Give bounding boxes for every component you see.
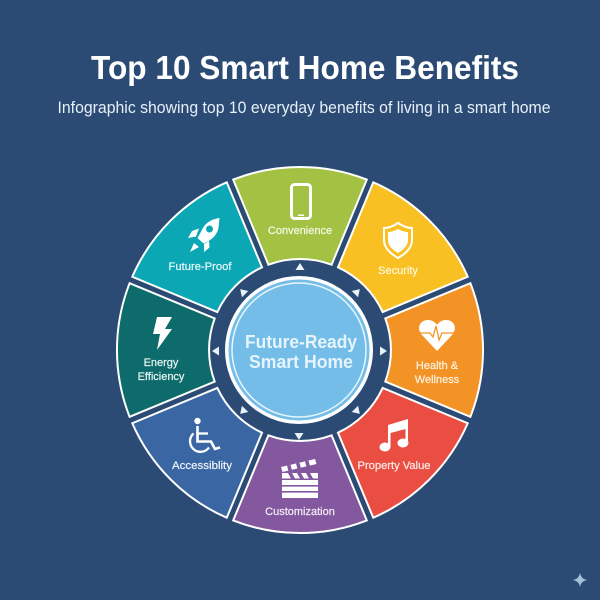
icon: heart with pulse — [419, 320, 455, 351]
arrow: south-east — [352, 406, 363, 417]
centre text — [245, 331, 358, 372]
arrow: south — [294, 433, 304, 440]
icon: lightning bolt — [153, 317, 172, 350]
segment: accessibility — [123, 363, 287, 527]
title: Top 10 Smart Home Benefits — [91, 49, 519, 86]
segment: convenience — [233, 167, 367, 265]
icon: wheelchair — [190, 418, 220, 452]
arrow: north-west — [237, 286, 248, 297]
icon: corner sparkle — [573, 573, 587, 587]
segment: security — [313, 173, 477, 337]
label: property value: Property Value — [358, 460, 430, 472]
icon: music note — [380, 419, 408, 452]
icon: rocket — [188, 218, 220, 252]
icon: smartphone — [292, 184, 310, 218]
label: security: Security — [378, 265, 418, 277]
centre text: Future-Ready — [245, 331, 358, 352]
label: health and wellness — [415, 360, 460, 386]
label: energy efficiency — [138, 357, 185, 383]
segment: customization — [233, 435, 367, 533]
label: health and wellness: Wellness — [415, 374, 460, 386]
arrow: north-east — [352, 286, 363, 297]
arrow: north — [296, 263, 304, 270]
arrow: south-west — [237, 406, 248, 417]
subtitle: Infographic showing top 10 everyday benefits of living in a smart home — [58, 99, 550, 117]
label: energy efficiency: Efficiency — [138, 371, 185, 383]
segment: property value — [313, 363, 477, 527]
label: convenience: Convenience — [268, 225, 332, 237]
icon: clapperboard — [281, 459, 318, 498]
label: energy efficiency: Energy — [144, 357, 179, 369]
arrow: west — [212, 346, 219, 356]
centre circle — [225, 276, 373, 424]
centre text: Smart Home — [249, 351, 353, 372]
label: customization: Customization — [265, 506, 335, 518]
segment: energy efficiency — [117, 283, 215, 417]
segment: future-proof — [123, 173, 287, 337]
label: health and wellness: Health & — [416, 360, 459, 372]
label: future-proof: Future-Proof — [168, 261, 232, 273]
arrows around centre — [212, 263, 387, 440]
icon: shield — [384, 223, 412, 258]
segment: health and wellness — [385, 283, 483, 417]
label: accessibility: Accessiblity — [172, 460, 233, 472]
wheel diagram — [117, 167, 483, 533]
arrow: east — [380, 346, 387, 356]
